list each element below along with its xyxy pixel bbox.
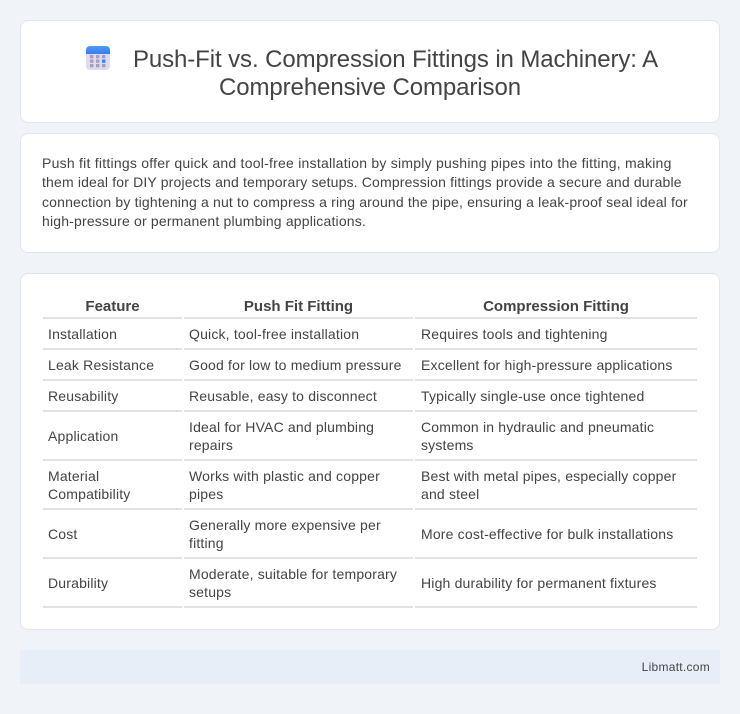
rows: Material bbox=[48, 468, 99, 484]
title: Comprehensive Comparison bbox=[219, 74, 521, 101]
rows: Typically single-use once tightened bbox=[421, 388, 644, 404]
rows: More cost-effective for bulk installations bbox=[421, 526, 673, 542]
intro text: high-pressure or permanent plumbing applications. bbox=[42, 213, 366, 229]
rows: Good for low to medium pressure bbox=[189, 357, 402, 373]
rows: Reusability bbox=[48, 388, 118, 404]
rows: pipes bbox=[189, 486, 223, 502]
rows: repairs bbox=[189, 437, 233, 453]
rows: Compatibility bbox=[48, 486, 130, 502]
intro text: them ideal for DIY projects and temporary setups. Compression fittings provide a secure and durable bbox=[42, 174, 682, 190]
table panel bbox=[20, 273, 720, 630]
title: Push-Fit vs. Compression Fittings in Machinery: A bbox=[133, 46, 658, 73]
intro text: connection by tightening a nut to compress a ring around the pipe, ensuring a leak-proof seal ideal for bbox=[42, 194, 688, 210]
header row bbox=[43, 298, 697, 319]
rows: Common in hydraulic and pneumatic bbox=[421, 419, 654, 435]
rows: Requires tools and tightening bbox=[421, 326, 608, 342]
footer bar bbox=[20, 650, 720, 684]
intro text: Push fit fittings offer quick and tool-free installation by simply pushing pipes into the fitting, making bbox=[42, 155, 672, 171]
title bbox=[133, 46, 658, 101]
rows: Ideal for HVAC and plumbing bbox=[189, 419, 374, 435]
header panel bbox=[20, 20, 720, 123]
rows: Leak Resistance bbox=[48, 357, 154, 373]
rows: Application bbox=[48, 428, 118, 444]
footer text: Libmatt.com bbox=[642, 660, 710, 674]
rows: setups bbox=[189, 584, 231, 600]
rows: High durability for permanent fixtures bbox=[421, 575, 657, 591]
comparison table bbox=[43, 298, 697, 608]
rows bbox=[43, 326, 697, 608]
rows: Quick, tool-free installation bbox=[189, 326, 359, 342]
rows: Cost bbox=[48, 526, 78, 542]
intro panel bbox=[20, 133, 720, 253]
header row: Feature bbox=[85, 298, 140, 315]
rows: and steel bbox=[421, 486, 479, 502]
rows: Generally more expensive per bbox=[189, 517, 381, 533]
rows: Installation bbox=[48, 326, 117, 342]
rows: fitting bbox=[189, 535, 224, 551]
rows: Durability bbox=[48, 575, 108, 591]
rows: Works with plastic and copper bbox=[189, 468, 380, 484]
rows: Excellent for high-pressure applications bbox=[421, 357, 673, 373]
header row: Compression Fitting bbox=[483, 298, 629, 315]
rows: Reusable, easy to disconnect bbox=[189, 388, 377, 404]
icon: calendar bbox=[86, 46, 110, 70]
rows: Moderate, suitable for temporary bbox=[189, 566, 397, 582]
header row: Push Fit Fitting bbox=[244, 298, 353, 315]
rows: Best with metal pipes, especially copper bbox=[421, 468, 676, 484]
rows: systems bbox=[421, 437, 474, 453]
intro text bbox=[42, 155, 688, 229]
